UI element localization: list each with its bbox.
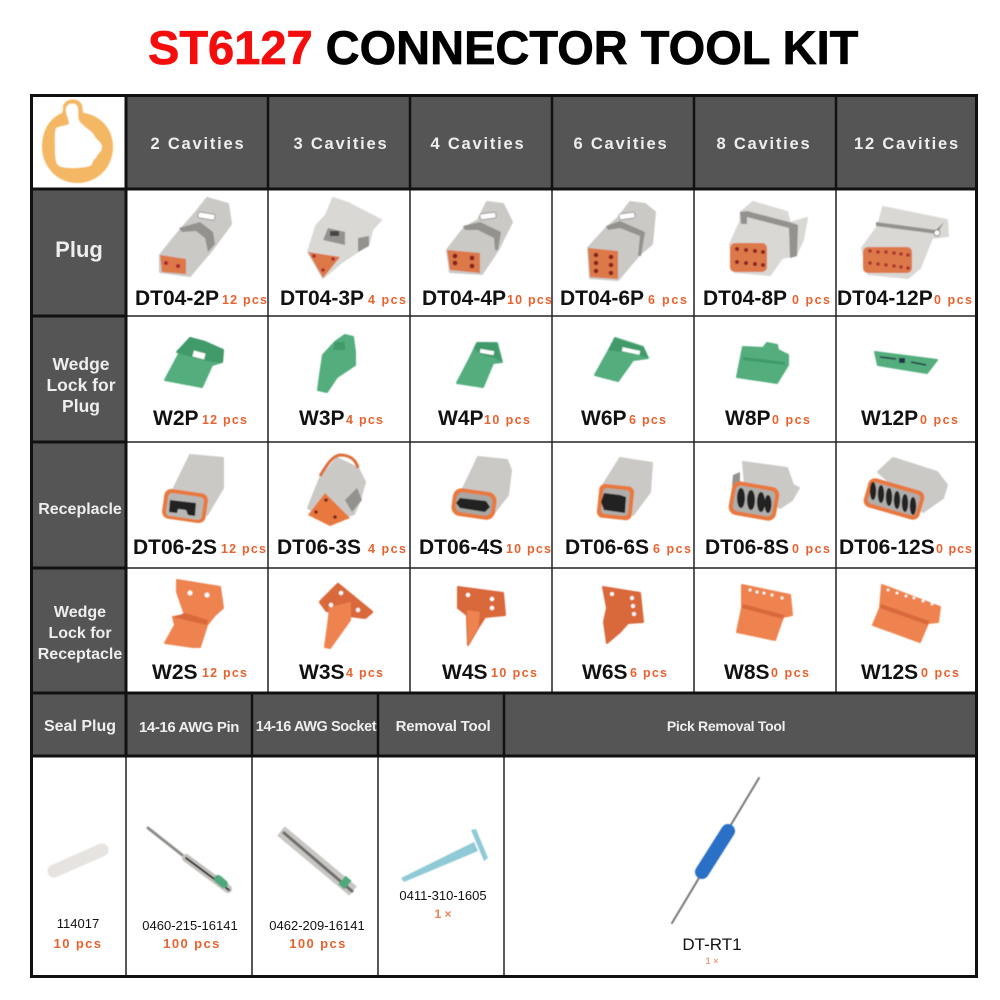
cell: DT04-8P [703,202,830,310]
logo: thumbs-up ring [42,99,113,183]
cell: DT06-8S [705,462,830,559]
icon: W6S wedge [603,587,643,643]
part label: W12P [861,407,918,430]
icon: DT04-8P plug [730,202,807,275]
cell: seal plug [54,850,102,951]
icon: seal plug [54,850,102,871]
part label: W8P [725,407,771,430]
part label: 0411-310-1605 [399,888,487,903]
quantity: 6 pcs [648,293,687,307]
part label: DT04-4P [422,287,506,310]
quantity: 4 pcs [368,542,406,556]
quantity: 100 pcs [163,936,221,951]
icon: DT06-8S receptacle [727,462,799,522]
row label: Receplacle: Receplacle [38,501,122,518]
part label: W4S [442,661,488,684]
quantity: 12 pcs [221,542,266,556]
quantity: 0 pcs [771,666,809,680]
cell: DT04-2P [135,198,267,310]
panel: wedge lock for receptacle row [152,580,959,684]
cell: W4S [442,587,537,684]
quantity: 0 pcs [792,542,830,556]
part label: W6S [582,661,628,684]
part label: DT06-8S [705,536,789,559]
cell: W6S [582,587,667,684]
cell: W8P [725,343,810,430]
quantity: 6 pcs [653,542,691,556]
row label: Wedge Lock for Plug: Plug [62,396,100,416]
row label: Plug: Plug [55,237,103,262]
icon: W12P wedge [875,352,937,373]
cell: DT04-3P [280,198,406,310]
cell: DT06-6S [565,458,691,559]
row label: Wedge Lock for Receptacle: Lock for [48,625,112,642]
column headers [150,135,960,153]
row label: Wedge Lock for Plug: Lock for [46,375,116,395]
part label: DT06-12S [839,536,935,559]
part label: DT04-8P [703,287,787,310]
icon: pin contact [148,828,229,890]
quantity: 6 pcs [630,666,667,680]
quantity: 1 × [434,907,452,921]
cell: DT06-2S [133,455,266,559]
icon: W8P wedge [737,343,788,383]
cell: W8S [724,585,809,684]
part label: DT04-12P [837,287,933,310]
icon: DT04-2P plug [160,198,231,276]
quantity: 0 pcs [934,293,972,307]
part label: W3P [299,407,345,430]
quantity: 10 pcs [506,542,551,556]
icon: W2S wedge [165,580,223,647]
part label: W6P [581,407,627,430]
cell: DT04-4P [422,202,552,310]
icon: pick removal tool [672,778,759,923]
quantity: 10 pcs [507,293,552,307]
cell: DT06-12S [839,458,972,559]
panel: accessories header row: Pick Removal Tool [667,718,785,734]
cell: W2P [153,338,247,430]
cell: DT04-6P [560,202,687,310]
quantity: 12 pcs [222,293,267,307]
part label: W2P [153,407,199,430]
column headers: 3 Cavities [293,135,389,153]
icon: removal tool [401,829,488,882]
quantity: 10 pcs [484,413,530,427]
panel: accessories header row [44,718,785,736]
quantity: 10 pcs [54,936,102,951]
icon: W6P wedge [595,338,648,381]
icon: DT06-3S receptacle [308,455,365,526]
part label: W4P [438,407,484,430]
column headers: 12 Cavities [854,135,960,153]
cell: DT06-3S [277,455,406,559]
icon: DT06-6S receptacle [596,458,652,521]
cell: W3S [299,585,383,684]
icon: DT06-12S receptacle [862,458,947,521]
icon: DT04-3P plug [308,198,381,278]
icon: W4P wedge [457,342,502,387]
icon: W3S wedge [321,585,371,648]
cell: socket [269,831,365,951]
title: ST6127 CONNECTOR TOOL KIT [148,21,859,74]
panel: receptacle row [133,455,972,559]
icon: W4S wedge [458,587,505,645]
row label: Wedge Lock for Plug: Wedge [52,354,110,374]
part label: DT06-4S [419,536,503,559]
quantity: 0 pcs [920,413,958,427]
panel: accessories header row: 14-16 AWG Socket [256,719,377,735]
quantity: 0 pcs [772,413,810,427]
cell: W4P [438,342,530,430]
quantity: 4 pcs [346,413,383,427]
panel: accessories header row: Seal Plug [44,718,116,735]
cell: DT06-4S [419,457,551,559]
quantity: 12 pcs [202,413,247,427]
cell: W12S [861,585,959,684]
cell: W6P [581,338,666,430]
icon: DT04-4P plug [447,202,512,274]
quantity: 12 pcs [202,666,247,680]
part label: W3S [299,661,345,684]
part label: 114017 [57,916,99,931]
panel: wedge lock for plug row [153,335,958,430]
part label: W2S [152,661,198,684]
part label: W8S [724,661,770,684]
row label: Wedge Lock for Receptacle: Wedge [54,604,106,621]
part label: DT04-3P [280,287,364,310]
icon: socket contact [281,831,353,892]
column headers: 2 Cavities [150,135,246,153]
part label: DT06-2S [133,536,217,559]
column headers: 4 Cavities [430,135,526,153]
icon: W8S wedge [737,585,792,640]
cell: W2S [152,580,247,684]
cell: pin [142,828,238,951]
row label: Wedge Lock for Receptacle: Receptacle [38,646,122,663]
quantity: 0 pcs [921,666,959,680]
cell: pick removal tool [672,778,759,966]
quantity: 4 pcs [346,666,383,680]
icon: W2P wedge [165,338,223,387]
part label: DT-RT1 [682,935,742,954]
icon: DT06-2S receptacle [161,455,223,524]
quantity: 1 × [706,956,718,966]
part label: W12S [861,661,918,684]
cell: W3P [299,335,383,430]
part label: DT04-2P [135,287,219,310]
part label: DT06-3S [277,536,361,559]
quantity: 6 pcs [629,413,666,427]
icon: DT06-4S receptacle [450,457,511,521]
part label: 0462-209-16141 [269,918,365,933]
quantity: 100 pcs [289,936,347,951]
part label: DT06-6S [565,536,649,559]
quantity: 0 pcs [792,293,830,307]
cell: DT04-12P [837,207,972,310]
quantity: 4 pcs [368,293,406,307]
icon: DT04-6P plug [588,202,655,280]
panel: accessories header row: 14-16 AWG Pin [139,719,239,736]
icon: W12S wedge [873,585,940,642]
icon: W3P wedge [318,335,355,392]
cell: removal tool [399,829,488,921]
cell: W12P [861,352,958,430]
part label: 0460-215-16141 [142,918,238,933]
column headers: 6 Cavities [573,135,669,153]
quantity: 0 pcs [936,542,972,556]
quantity: 10 pcs [491,666,537,680]
column headers: 8 Cavities [716,135,812,153]
panel: accessories header row: Removal Tool [396,718,490,735]
part label: DT04-6P [560,287,644,310]
panel: plug row [135,198,972,310]
icon: DT04-12P plug [862,207,948,278]
